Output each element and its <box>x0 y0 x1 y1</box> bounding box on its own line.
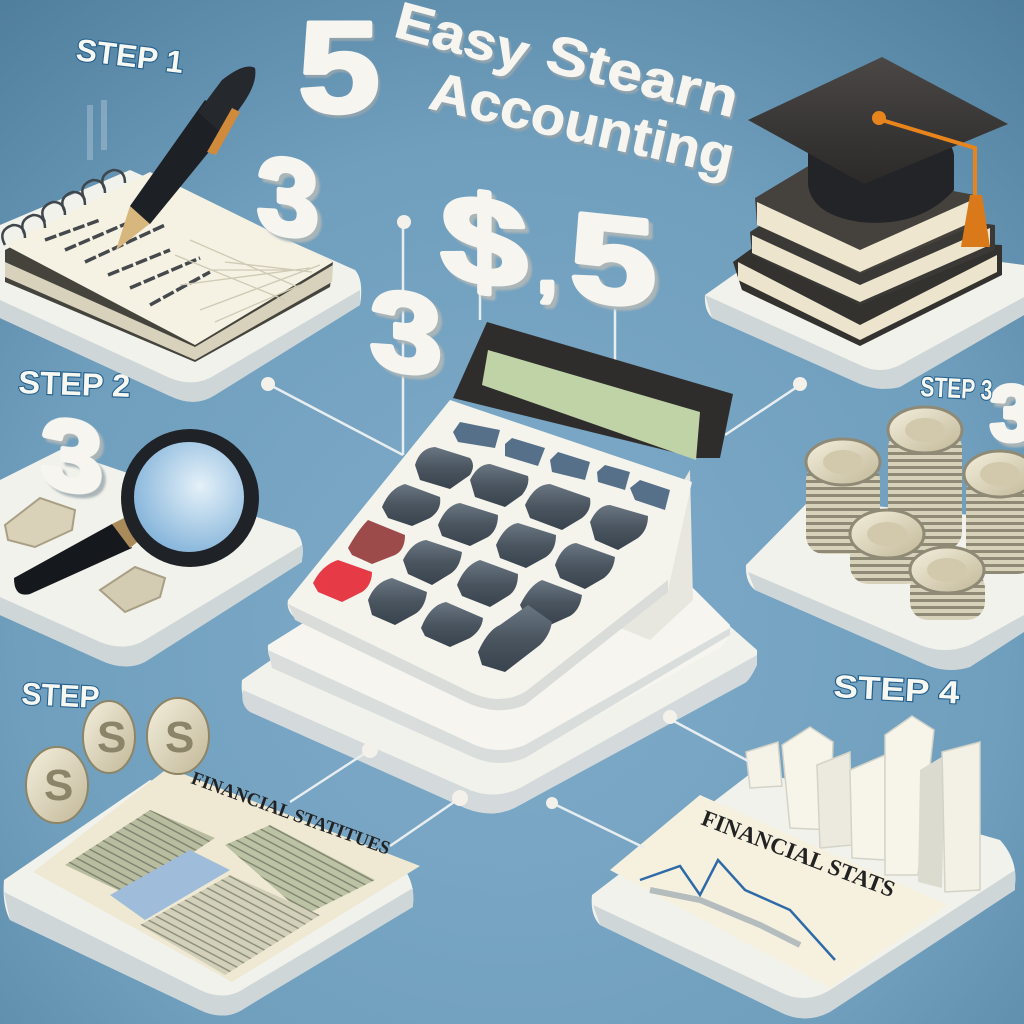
floating numerals <box>41 132 1024 517</box>
numeral 5: 5 <box>570 186 656 334</box>
title <box>298 0 745 187</box>
books <box>733 235 1002 346</box>
panel: step 3 coins <box>746 407 1024 670</box>
icon: floating coins: S <box>165 713 194 762</box>
calculator function keys <box>453 422 670 510</box>
books platform <box>705 235 1024 388</box>
calculator display <box>453 322 733 458</box>
front connector lines <box>290 710 750 848</box>
step 4 label: STEP 4 <box>833 668 961 711</box>
calculator stand <box>600 470 693 640</box>
statement platform <box>592 770 1015 1018</box>
panel: books and cap <box>705 57 1024 389</box>
financial statement with banknotes: FINANCIAL STATITUES <box>188 768 393 860</box>
title: Accounting <box>424 61 740 187</box>
notebook platform <box>0 170 361 402</box>
small coins <box>5 498 75 547</box>
back connector lines <box>261 215 807 455</box>
icon: graduation cap <box>748 57 1008 247</box>
notebook list lines <box>45 220 210 305</box>
panel: central calculator <box>242 322 757 813</box>
red key <box>313 560 372 602</box>
numeral 3 centre: 3 <box>370 264 442 400</box>
panel: step 5 money and statement <box>4 698 420 1016</box>
step 5 partial label: STEP <box>21 676 100 715</box>
icon: magnifier <box>14 429 259 595</box>
financial statement paper <box>610 795 948 988</box>
coin stacks <box>806 407 1024 620</box>
step 3 label: STEP 3 <box>920 371 993 406</box>
icon: floating coins: S <box>97 713 126 762</box>
financial statement paper: FINANCIAL STATS <box>698 805 899 902</box>
3D bar chart <box>746 716 980 892</box>
money platform <box>4 780 413 1016</box>
stepped base <box>242 600 757 813</box>
decimal point: , <box>538 232 556 306</box>
calculator body <box>288 400 692 708</box>
dollar sign: $ <box>441 167 527 317</box>
numeral 3 upper: 3 <box>257 132 319 262</box>
step 2 label: STEP 2 <box>18 364 131 404</box>
magnifier platform <box>0 450 303 666</box>
title: Stearn <box>540 23 745 129</box>
panel: step 1 notebook <box>0 66 361 402</box>
notebook <box>5 175 333 362</box>
notebook spiral <box>2 170 125 245</box>
numeral 3 left: 3 <box>41 396 103 517</box>
panel: step 4 chart and statement <box>592 716 1015 1018</box>
coins platform <box>746 500 1024 669</box>
icon: floating coins: S <box>44 761 73 810</box>
icon: pen <box>90 66 255 250</box>
financial statement with banknotes <box>33 768 420 982</box>
step 1 label: STEP 1 <box>74 32 186 80</box>
calculator keys <box>368 447 648 672</box>
panel: step 2 magnifier <box>0 429 303 667</box>
icon: floating coins <box>26 698 209 823</box>
